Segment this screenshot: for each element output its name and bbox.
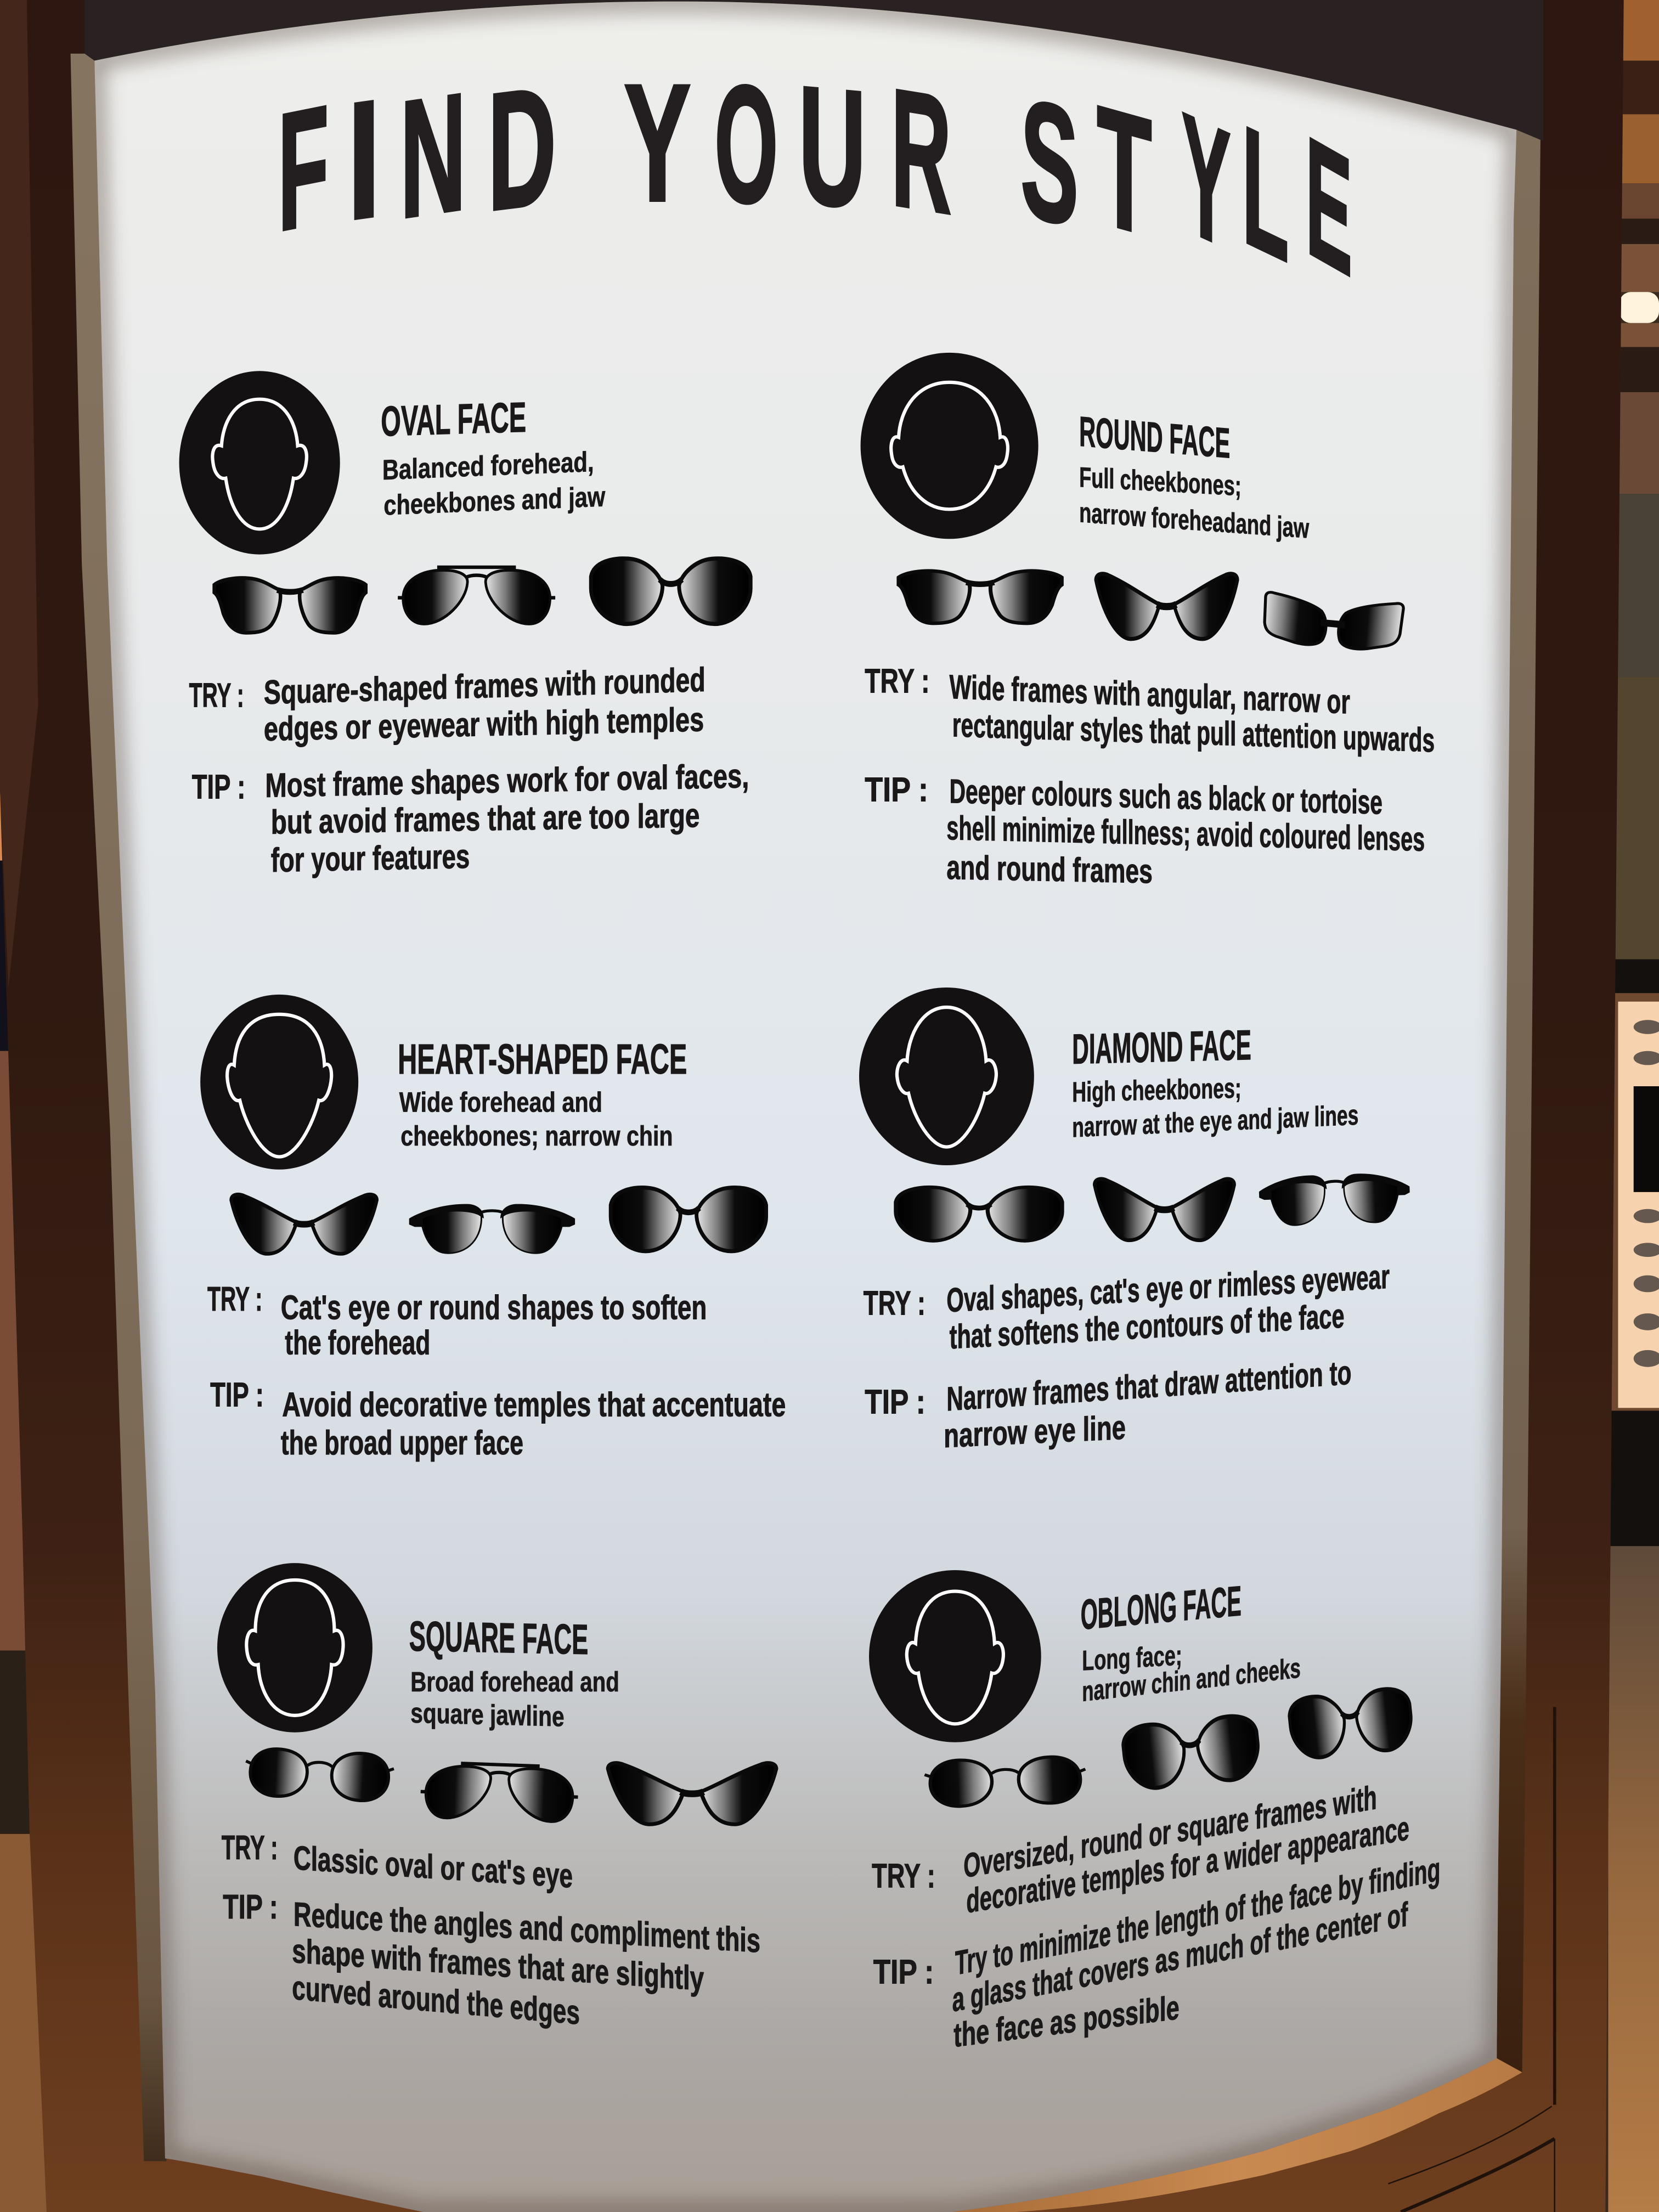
title — [278, 49, 1352, 313]
sunglasses: heart-shaped face — [231, 1188, 766, 1254]
tip: diamond face: narrow eye line — [944, 1409, 1126, 1455]
description: square face: square jawline — [410, 1697, 565, 1733]
title: F — [278, 71, 329, 267]
try: heart-shaped face: the forehead — [285, 1324, 430, 1362]
heading: oblong face: OBLONG FACE — [1081, 1577, 1242, 1639]
panel: heart-shaped face — [200, 995, 786, 1462]
heading: oval face: OVAL FACE — [381, 394, 526, 445]
tip: heart-shaped face: the broad upper face — [281, 1424, 523, 1462]
title: R — [891, 53, 951, 249]
tip: round face: TIP : — [865, 771, 928, 809]
description: diamond face — [1072, 1072, 1358, 1143]
tip: round face: Deeper colours such as black or tortoise — [950, 772, 1383, 822]
left bezel strip — [71, 54, 166, 2161]
title: D — [488, 52, 556, 246]
icon: diamond face — [859, 988, 1034, 1165]
try: oval face: edges or eyewear with high temples — [264, 701, 704, 748]
try: square face: Classic oval or cat's eye — [294, 1839, 573, 1895]
tip: heart-shaped face: TIP : — [210, 1376, 264, 1414]
heading: square face: SQUARE FACE — [409, 1613, 588, 1663]
tip: oblong face — [873, 1850, 1440, 2055]
tip: square face: TIP : — [223, 1888, 278, 1926]
panel: oval face — [179, 371, 751, 879]
try: diamond face: Oval shapes, cat's eye or rimless eyewear — [946, 1258, 1390, 1319]
tip: diamond face — [865, 1354, 1351, 1455]
title: T — [1097, 71, 1152, 272]
heading: diamond face: DIAMOND FACE — [1072, 1022, 1251, 1073]
icon: heart-shaped face — [200, 995, 358, 1170]
description: round face: narrow foreheadand jaw — [1079, 496, 1310, 544]
title: N — [400, 58, 466, 254]
icon: oval face — [179, 371, 340, 555]
description: round face: Full cheekbones; — [1079, 461, 1242, 501]
try: heart-shaped face — [207, 1280, 707, 1362]
frame left lighter side — [0, 0, 38, 988]
title: I — [347, 65, 381, 255]
tip: diamond face: TIP : — [865, 1384, 926, 1421]
title: E — [1306, 100, 1352, 313]
try: heart-shaped face: TRY : — [207, 1280, 262, 1318]
try: oblong face — [872, 1779, 1409, 1921]
description: heart-shaped face: cheekbones; narrow chin — [400, 1120, 673, 1152]
try: oval face: Square-shaped frames with rounded — [264, 661, 706, 712]
try: round face: TRY : — [865, 663, 930, 701]
tip: diamond face: Narrow frames that draw attention to — [946, 1354, 1351, 1418]
title: O — [714, 49, 778, 239]
panel: square face — [217, 1563, 776, 2032]
tip: round face: and round frames — [946, 849, 1153, 891]
tip: oblong face: the face as possible — [953, 1989, 1180, 2055]
panel: diamond face — [859, 988, 1411, 1455]
tip: square face — [223, 1888, 760, 2032]
try: square face: TRY : — [222, 1829, 278, 1867]
description: heart-shaped face: Wide forehead and — [399, 1086, 602, 1118]
title: S — [1021, 63, 1079, 262]
try: heart-shaped face: Cat's eye or round shapes to soften — [281, 1289, 707, 1327]
heading: round face: ROUND FACE — [1079, 408, 1230, 467]
description: oblong face: Long face; — [1082, 1639, 1182, 1677]
sunglasses: oblong face — [924, 1687, 1414, 1808]
tip: oblong face: TIP : — [873, 1953, 934, 1991]
tip: heart-shaped face — [210, 1376, 786, 1462]
tip: heart-shaped face: Avoid decorative temples that accentuate — [282, 1386, 786, 1424]
icon: oblong face — [869, 1570, 1041, 1742]
try: oblong face: decorative temples for a wider appearance — [966, 1809, 1409, 1921]
frame seams — [1388, 1707, 1555, 2212]
sunglasses: diamond face — [896, 1172, 1411, 1241]
title: Y — [1182, 77, 1231, 285]
description: oval face: Balanced forehead, — [382, 445, 594, 486]
try: diamond face: that softens the contours of the face — [950, 1297, 1345, 1356]
tip: round face — [865, 771, 1425, 891]
tip: oval face: but avoid frames that are too large — [271, 797, 699, 842]
try: oval face — [189, 661, 706, 748]
try: diamond face: TRY : — [864, 1285, 926, 1323]
try: oval face: TRY : — [189, 676, 244, 714]
panel: round face — [861, 353, 1435, 891]
tip: square face: shape with frames that are slightly — [292, 1932, 704, 1998]
right bezel strip — [1497, 124, 1541, 2072]
tip: oval face — [192, 757, 749, 879]
top dark band — [84, 0, 1543, 141]
description: oblong face — [1082, 1639, 1301, 1707]
description: square face: Broad forehead and — [410, 1666, 619, 1697]
description: heart-shaped face — [399, 1086, 673, 1152]
icon: round face — [861, 353, 1039, 539]
try: round face — [865, 663, 1435, 759]
tip: square face: curved around the edges — [292, 1969, 580, 2032]
description: diamond face: narrow at the eye and jaw lines — [1072, 1099, 1358, 1143]
tip: oval face: Most frame shapes work for oval faces, — [265, 757, 749, 805]
try: diamond face — [864, 1258, 1390, 1356]
description: oval face — [382, 445, 606, 521]
try: square face — [222, 1829, 573, 1895]
sunglasses: round face — [899, 571, 1404, 653]
title: Y — [624, 50, 691, 236]
description: square face — [410, 1666, 619, 1733]
panel: oblong face — [869, 1570, 1440, 2055]
title: L — [1242, 90, 1289, 298]
description: round face — [1079, 461, 1310, 544]
tip: oval face: TIP : — [192, 768, 245, 806]
tip: oblong face: a glass that covers as much of the center of — [952, 1895, 1408, 2019]
title: U — [799, 52, 866, 244]
description: diamond face: High cheekbones; — [1072, 1072, 1242, 1108]
icon: square face — [217, 1563, 373, 1733]
try: oblong face: TRY : — [872, 1858, 935, 1895]
description: oval face: cheekbones and jaw — [383, 480, 606, 521]
description: oblong face: narrow chin and cheeks — [1082, 1651, 1301, 1707]
heading: heart-shaped face: HEART-SHAPED FACE — [398, 1036, 687, 1083]
sunglasses: oval face — [215, 558, 751, 633]
try: oblong face: Oversized, round or square frames with — [963, 1779, 1377, 1885]
try: round face: Wide frames with angular, narrow or — [950, 668, 1350, 721]
tip: oval face: for your features — [271, 838, 470, 879]
lit lower lip of frame — [952, 2058, 1522, 2212]
sunglasses: square face — [244, 1747, 776, 1824]
tip: square face: Reduce the angles and compliment this — [294, 1895, 760, 1960]
